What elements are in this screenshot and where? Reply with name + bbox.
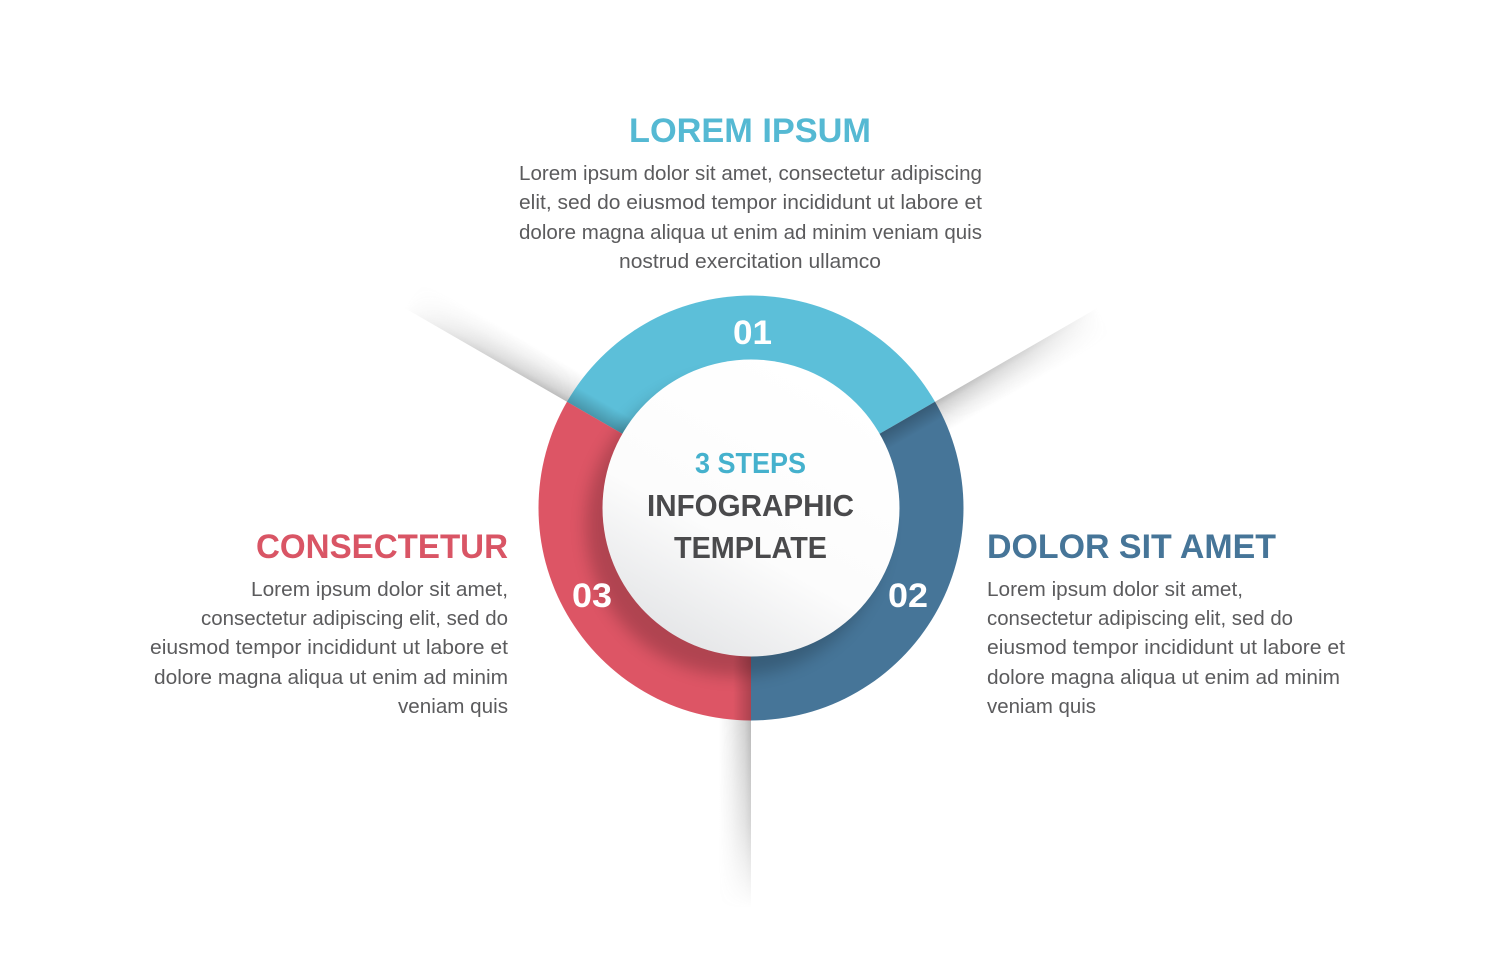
panel: step 2 dolor sit amet — [987, 528, 1345, 718]
text block: step 3 description: consectetur adipiscing elit, sed do — [201, 607, 508, 630]
text block: step 1 description: nostrud exercitation ullamco — [619, 250, 881, 273]
heading: lorem ipsum: LOREM IPSUM — [629, 112, 871, 150]
text block: step 2 description: eiusmod tempor incididunt ut labore et — [987, 636, 1345, 659]
segment 02 — [751, 402, 963, 720]
chart: three segment ring — [539, 296, 963, 722]
panel: step 3 consectetur — [150, 528, 508, 718]
heading: dolor sit amet: DOLOR SIT AMET — [987, 528, 1276, 566]
text block: step 1 description: elit, sed do eiusmod tempor incididunt ut labore et — [519, 191, 982, 214]
ring shading — [566, 376, 945, 722]
cast shadow: upper left — [420, 315, 581, 404]
center title: TEMPLATE — [674, 530, 827, 565]
text block: step 3 description: eiusmod tempor incididunt ut labore et — [150, 636, 508, 659]
text block: step 2 description: consectetur adipiscing elit, sed do — [987, 607, 1293, 630]
cast shadow: bottom — [725, 719, 751, 892]
text block: step 1 description: Lorem ipsum dolor sit amet, consectetur adipiscing — [519, 162, 982, 185]
center title: 3 STEPS — [695, 448, 806, 480]
text block: step 1 description — [519, 162, 982, 273]
infographic: 3 steps circle diagram — [150, 118, 1345, 892]
center circle — [602, 360, 900, 656]
number 01: 01 — [733, 314, 772, 352]
text block: step 3 description — [150, 578, 508, 718]
number 02: 02 — [888, 577, 928, 615]
text block: step 3 description: Lorem ipsum dolor sit amet, — [251, 578, 508, 601]
segment 01 — [567, 296, 935, 508]
cast shadow: upper right — [932, 318, 1083, 424]
heading: consectetur: CONSECTETUR — [256, 528, 508, 566]
text block: step 1 description: dolore magna aliqua ut enim ad minim veniam quis — [519, 221, 982, 244]
number 03: 03 — [572, 577, 612, 615]
text block: step 2 description: dolore magna aliqua ut enim ad minim — [987, 666, 1340, 689]
panel: step 1 lorem ipsum — [519, 112, 982, 273]
center title: INFOGRAPHIC — [647, 488, 854, 523]
segment 03 — [539, 402, 751, 720]
text block: step 3 description: dolore magna aliqua ut enim ad minim — [154, 666, 508, 689]
text block: step 3 description: veniam quis — [398, 695, 508, 718]
text block: step 2 description — [987, 578, 1345, 718]
center title — [647, 448, 854, 565]
text block: step 2 description: veniam quis — [987, 695, 1096, 718]
text block: step 2 description: Lorem ipsum dolor sit amet, — [987, 578, 1243, 601]
